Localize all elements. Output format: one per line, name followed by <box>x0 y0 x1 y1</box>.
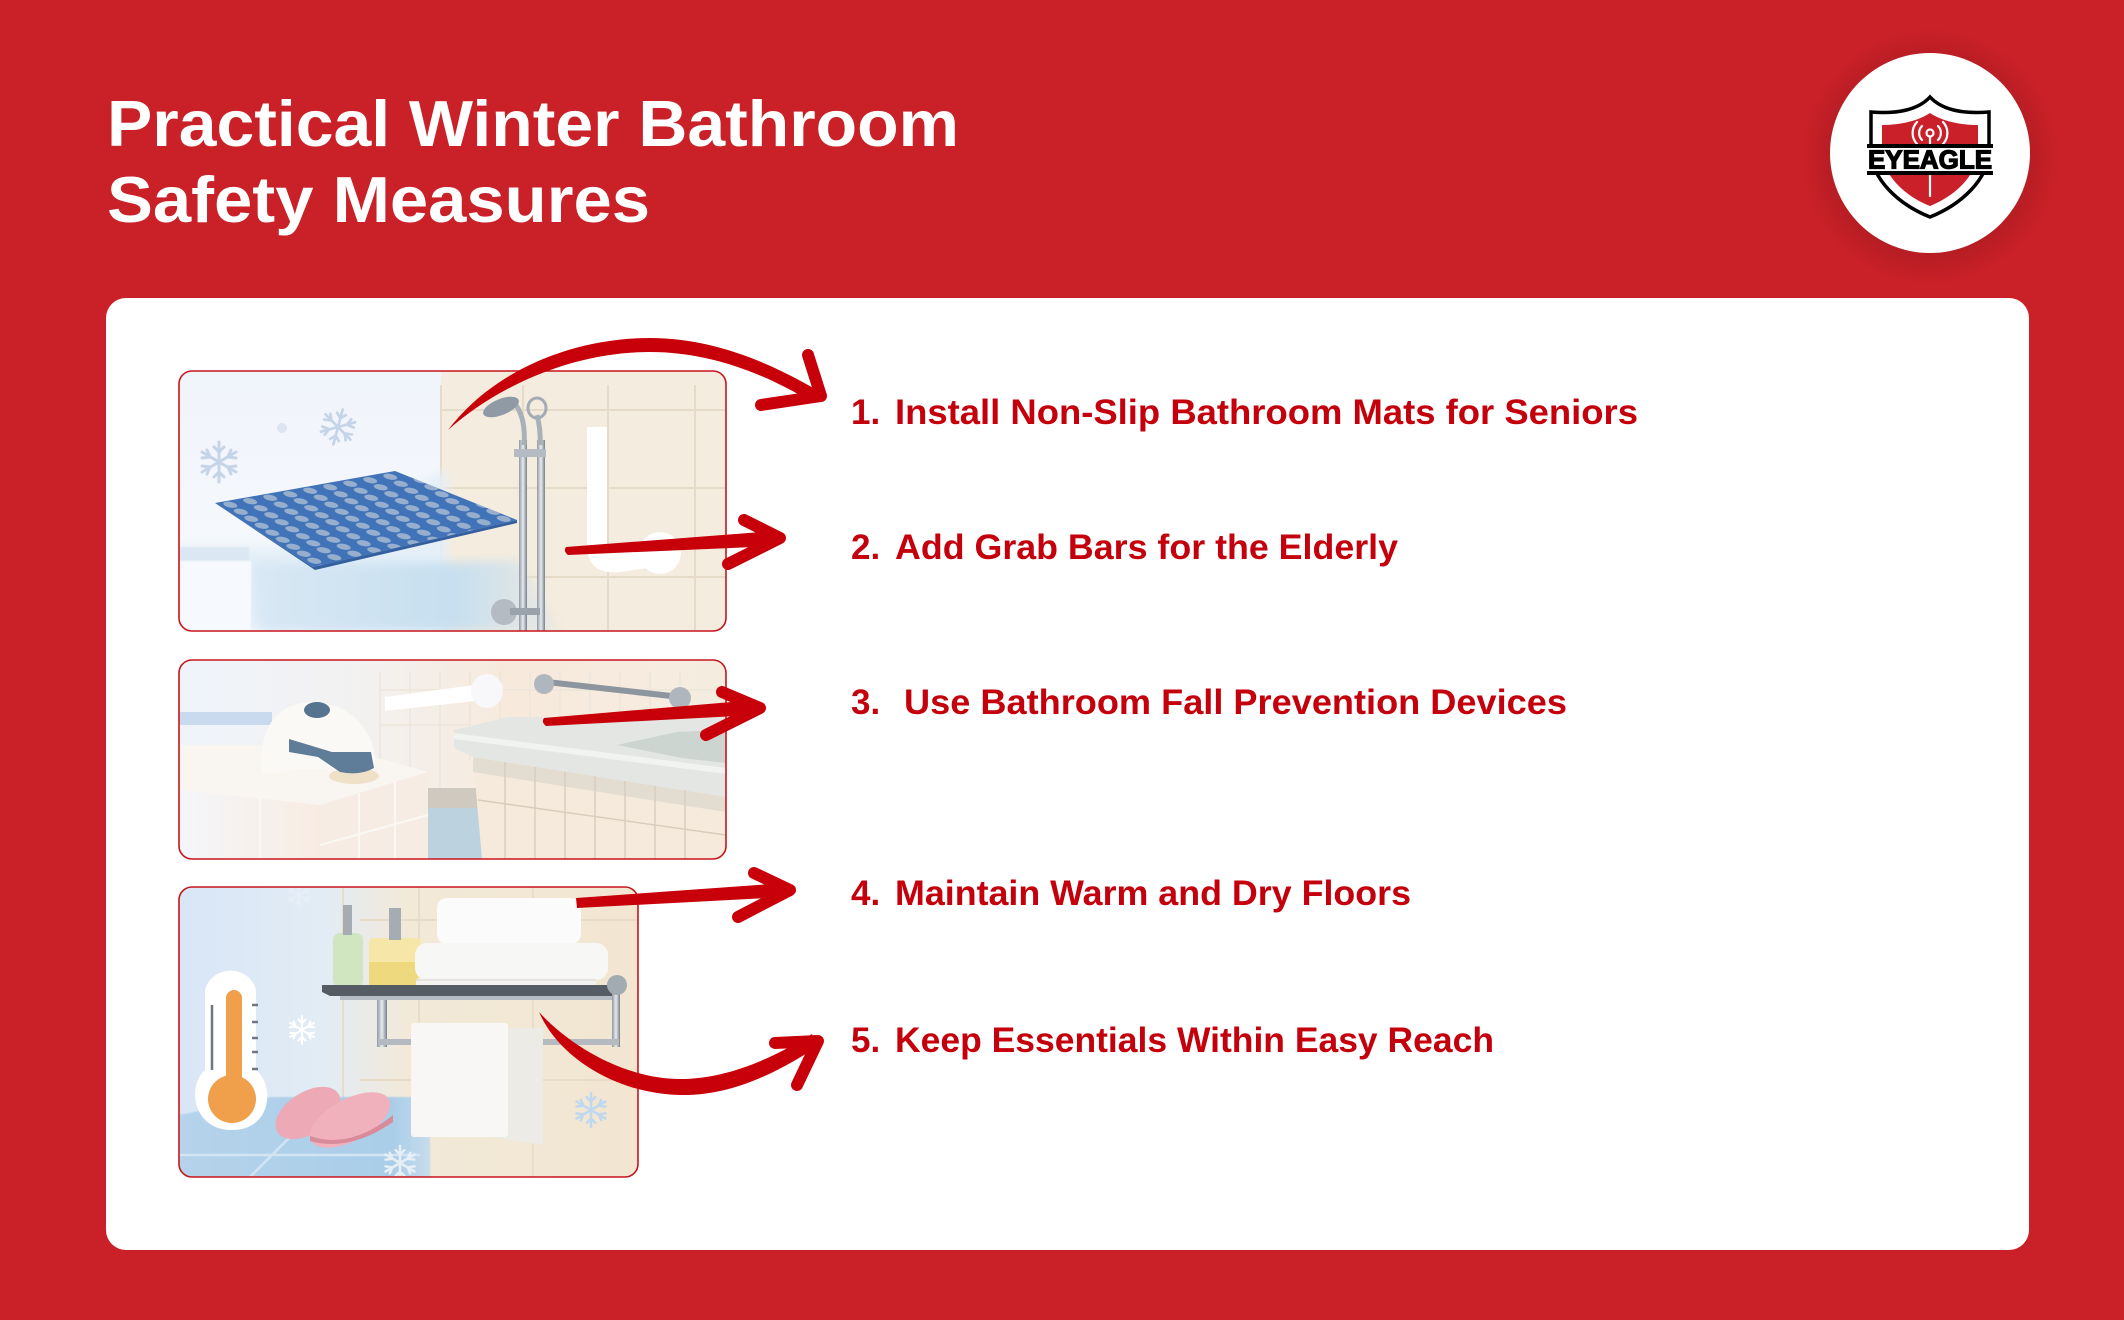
white wall bar <box>385 674 503 711</box>
image: non-slip mat and shower rail <box>179 371 726 631</box>
title: Practical Winter Bathroom <box>107 87 959 160</box>
pink slippers <box>276 1086 393 1148</box>
bath seat device <box>261 702 379 784</box>
list item 3: 3. <box>851 683 880 722</box>
logo: Eyeagle shield badge: EYEAGLE <box>1868 144 1992 174</box>
steel grab bar <box>534 674 691 709</box>
logo: Eyeagle shield badge <box>1802 29 2058 285</box>
shower rail <box>480 392 546 631</box>
list item 2: Add Grab Bars for the Elderly <box>895 528 1399 567</box>
bath bench block <box>179 745 428 859</box>
title <box>107 87 959 236</box>
arrow 3 <box>543 692 760 735</box>
icon: snowflakes <box>202 406 357 482</box>
title: Safety Measures <box>107 163 650 236</box>
arrow 4 <box>576 873 790 917</box>
list item 4: Maintain Warm and Dry Floors <box>895 874 1411 913</box>
icon: thermometer <box>195 971 267 1130</box>
image: towel shelf, thermometer and slippers <box>179 883 638 1180</box>
non-slip mat <box>215 471 517 570</box>
list item 2: 2. <box>851 528 880 567</box>
soap bottles <box>333 905 421 988</box>
towels on shelf <box>415 898 608 985</box>
blue floor mat <box>179 1097 430 1177</box>
list item 4: 4. <box>851 874 880 913</box>
arrow 5 <box>539 1012 818 1095</box>
list item 5: Keep Essentials Within Easy Reach <box>895 1021 1494 1060</box>
bathtub <box>454 717 726 859</box>
white grab bar <box>587 427 681 574</box>
arrow 1 <box>448 338 821 430</box>
list item 3: Use Bathroom Fall Prevention Devices <box>904 683 1567 722</box>
metal shelf and rod <box>322 975 627 1047</box>
icon: snowflakes <box>289 883 605 1180</box>
arrow 2 <box>565 520 780 564</box>
list item 1: Install Non-Slip Bathroom Mats for Seniors <box>895 393 1638 432</box>
list item 1: 1. <box>851 393 880 432</box>
image: bath bench with grab bars <box>179 660 726 859</box>
panel: white content card <box>106 298 2029 1250</box>
list item 5: 5. <box>851 1021 880 1060</box>
hanging towel <box>411 1023 543 1145</box>
